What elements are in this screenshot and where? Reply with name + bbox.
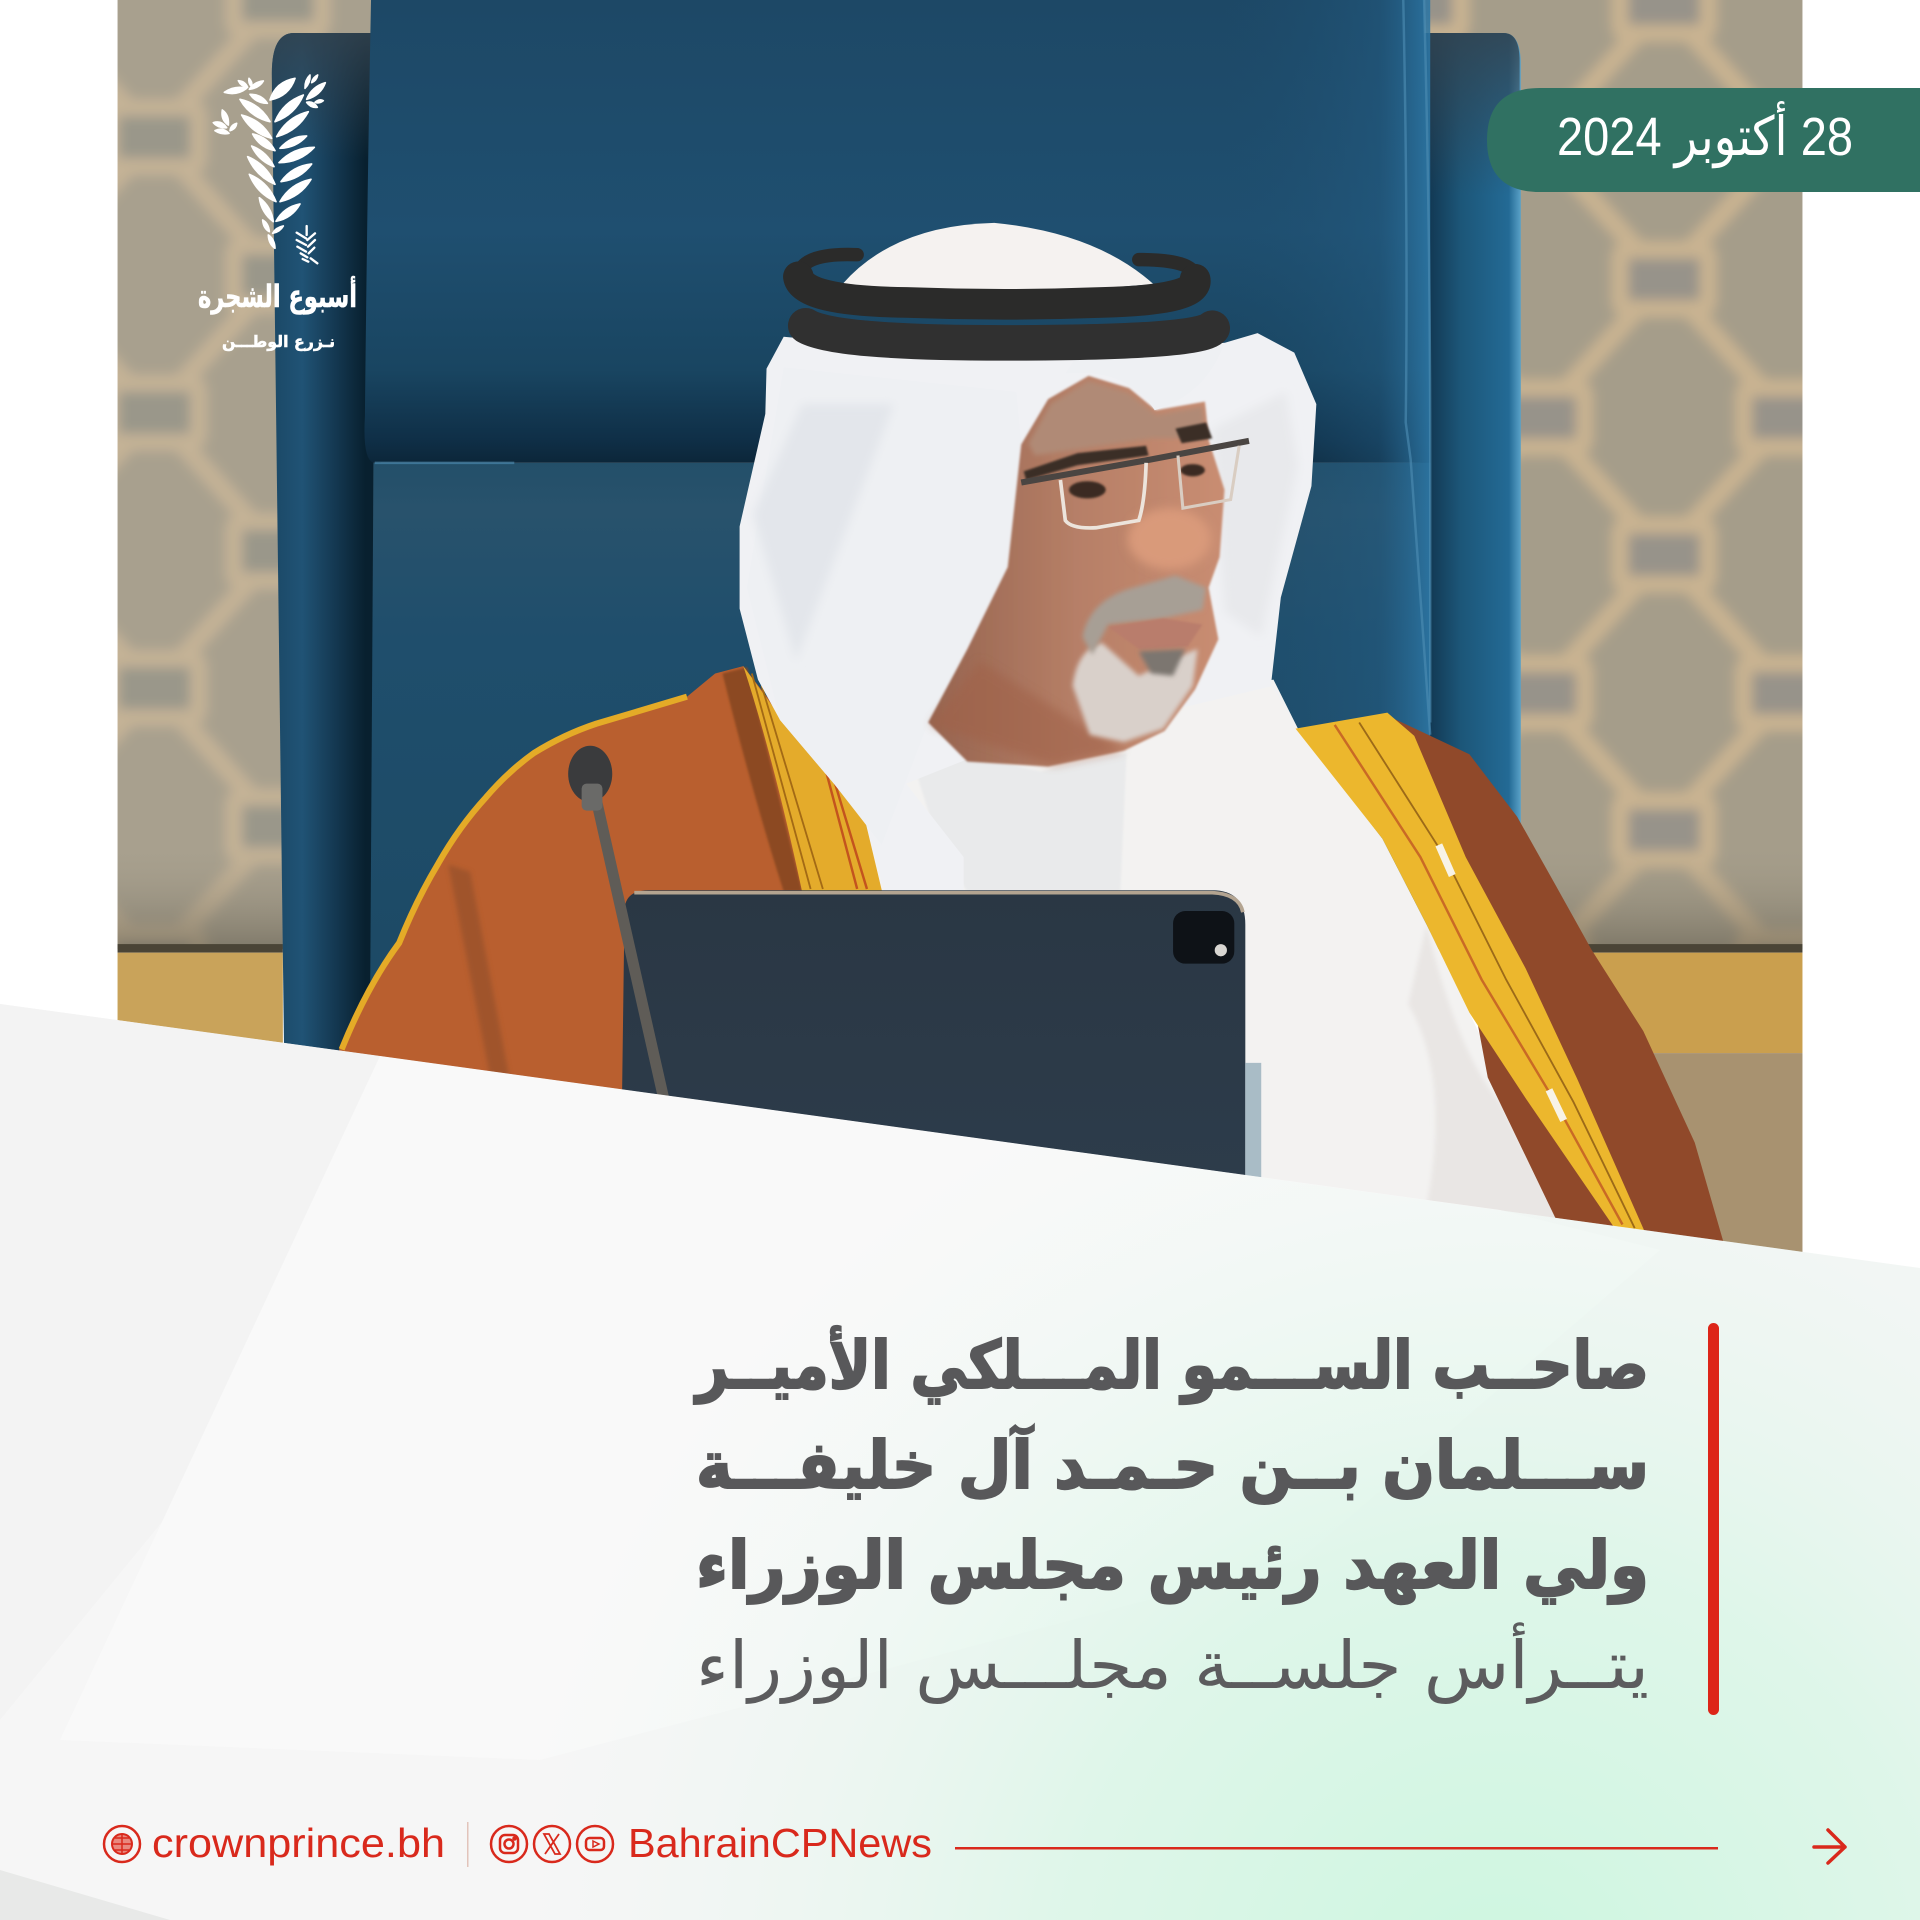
strip right of tablet (1245, 1063, 1261, 1185)
wallpaper right (1425, 0, 1802, 1252)
ghutra left fold (747, 367, 1021, 845)
right robe gold band (1296, 713, 1647, 1237)
robe gold band (743, 666, 884, 891)
chair right wing (1420, 33, 1521, 857)
rule (955, 1847, 1718, 1850)
neck shadow (931, 661, 1124, 765)
man: white thobe (866, 680, 1580, 1249)
red vertical bar (1708, 1323, 1719, 1715)
facet bottom-left corner (0, 1870, 170, 1920)
eyes (1069, 464, 1205, 498)
facet mint wash (0, 1004, 1920, 1920)
heading line 2: ســـلمان بــن حـمـد آل خليفـــة (696, 1424, 1649, 1504)
handle: BahrainCPNews (628, 1820, 932, 1866)
man: left robe (339, 666, 884, 1102)
panel: lower background (0, 1004, 1920, 1920)
facet grey left (0, 1004, 380, 1720)
eyebrow (1024, 446, 1149, 480)
chair right highlight (1224, 0, 1430, 882)
icon: globe (104, 1826, 140, 1862)
heading line 3: ولي العهد رئيس مجلس الوزراء (696, 1527, 1649, 1605)
robe neck shade (722, 667, 802, 891)
icon: instagram (491, 1826, 527, 1862)
logo leaves (213, 75, 325, 263)
ghutra right shade (1212, 392, 1298, 637)
chair left wing (272, 33, 373, 1053)
collar (906, 741, 1127, 891)
chair lower cushion (370, 463, 1430, 1053)
eyebrow right (1176, 422, 1212, 443)
heading line 4: يتــرأس جلســة مجلـــس الوزراء (696, 1622, 1649, 1704)
chair seam highlights (375, 0, 1430, 735)
heading block (693, 1325, 1649, 1704)
chair right wing top shade (1428, 33, 1520, 196)
tablet (621, 890, 1245, 1188)
panel: photo (86, 0, 1831, 1261)
goatee (1139, 649, 1185, 676)
agal upper ring (798, 277, 1195, 304)
logo: tree week (198, 75, 357, 351)
heading line 1: صاحــب الســـمو المـــلكي الأميــر (693, 1325, 1649, 1405)
moustache (1082, 576, 1206, 655)
logo tagline: نـزرع الوطـــن (222, 332, 335, 351)
footer (104, 1820, 1845, 1867)
lips (1108, 618, 1202, 649)
nose (1128, 508, 1211, 569)
date pill (1487, 88, 1920, 192)
icon: X (534, 1826, 570, 1862)
ghutra headdress (740, 333, 1316, 891)
beard (1073, 643, 1198, 742)
robe fold (448, 864, 509, 1078)
chair left wing top shade (272, 33, 373, 159)
tablet camera (1173, 911, 1234, 964)
right robe brown (1384, 714, 1729, 1261)
microphone (568, 746, 664, 1098)
ghutra left shaded fold (753, 404, 894, 661)
face (928, 376, 1224, 767)
robe gold trim (342, 697, 687, 1049)
ghutra overhang (1065, 343, 1224, 410)
divider (467, 1822, 468, 1867)
glasses (1021, 441, 1249, 528)
agal lower ring (806, 326, 1212, 343)
website: crownprince.bh (152, 1820, 445, 1866)
wallpaper left (118, 0, 375, 1043)
icon: youtube (577, 1826, 613, 1862)
agal back (798, 254, 1195, 277)
date text: 28 أكتوبر 2024 (1557, 101, 1853, 168)
chair upper cushion (364, 0, 1430, 463)
logo title: أسبوع الشجرة (198, 276, 357, 315)
ghafiyah cap (842, 223, 1153, 291)
thobe shaded fold (1408, 924, 1567, 1224)
forehead shade (1029, 381, 1206, 456)
facet lighter (60, 1056, 1660, 1760)
arrow (1814, 1830, 1845, 1863)
